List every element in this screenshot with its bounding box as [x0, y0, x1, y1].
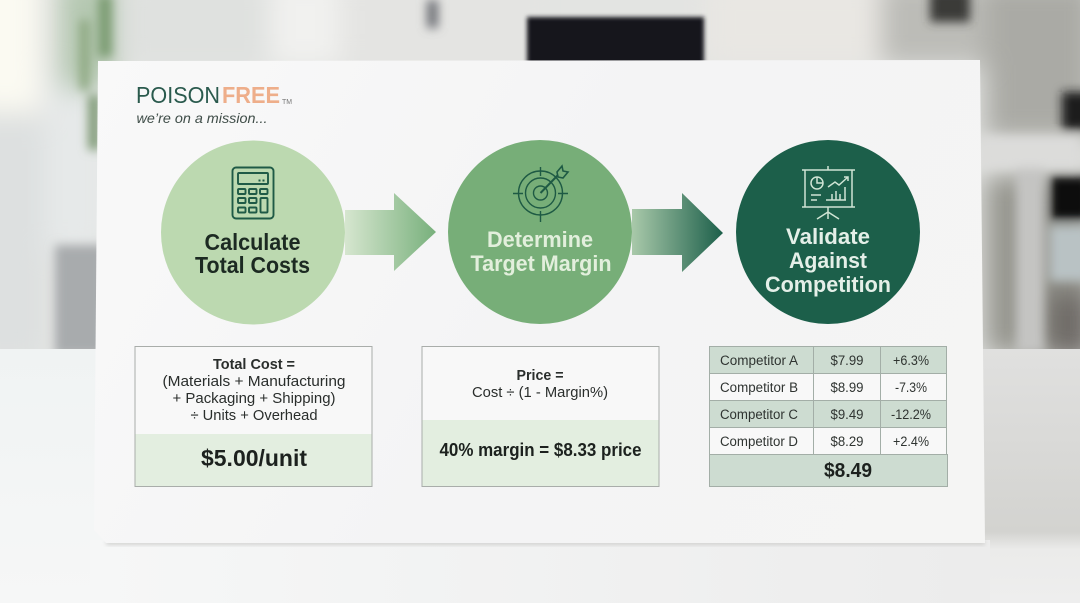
- step 3: validate against competition: [736, 140, 920, 324]
- formula text: + Packaging + Shipping): [172, 390, 336, 407]
- tagline: we’re on a mission...: [136, 110, 268, 126]
- formula text: (Materials + Manufacturing: [162, 373, 346, 390]
- heading: step 2: Target Margin: [470, 251, 612, 276]
- result: recommended price: $8.49: [824, 460, 872, 482]
- result: margin price: 40% margin = $8.33 price: [440, 439, 642, 460]
- arrow: step 2 to 3: [632, 193, 723, 272]
- heading: step 3: Competition: [765, 272, 891, 297]
- row: competitor D: $8.29: [830, 434, 864, 449]
- formula text: Total Cost =: [213, 356, 295, 373]
- heading: step 1: Calculate: [204, 229, 300, 255]
- logo: [136, 82, 292, 126]
- panel: total cost formula: [135, 346, 372, 486]
- row: competitor D: +2.4%: [893, 434, 929, 449]
- formula text: Cost ÷ (1 - Margin%): [472, 384, 608, 401]
- row: competitor B: $8.99: [830, 380, 864, 395]
- logo wordmark: POISON: [136, 82, 220, 108]
- row: competitor B: -7.3%: [895, 380, 927, 395]
- row: competitor C: Competitor C: [720, 407, 798, 422]
- panel: price formula: [422, 346, 659, 486]
- result: cost per unit: $5.00/unit: [201, 445, 307, 471]
- heading: step 2: Determine: [487, 227, 593, 252]
- logo wordmark: FREE: [222, 82, 280, 108]
- formula text: Price =: [516, 367, 564, 384]
- row: competitor A: Competitor A: [720, 353, 798, 368]
- icon: calculator: [232, 168, 274, 218]
- formula text: ÷ Units + Overhead: [190, 407, 318, 424]
- row: competitor C: $9.49: [830, 407, 864, 422]
- heading: step 3: Validate: [786, 224, 870, 249]
- trademark: TM: [282, 99, 292, 106]
- icon: target: [513, 166, 568, 222]
- row: competitor A: [720, 353, 929, 368]
- row: competitor D: Competitor D: [720, 434, 798, 449]
- step 2: determine target margin: [448, 140, 632, 324]
- row: competitor A: $7.99: [830, 353, 864, 368]
- step 1: calculate total costs: [161, 140, 345, 324]
- heading: step 3: Against: [789, 248, 868, 273]
- panel: competitor table: [710, 346, 948, 486]
- row: competitor A: +6.3%: [893, 353, 929, 368]
- icon: presentation board: [802, 166, 855, 219]
- card: [94, 60, 985, 543]
- row: competitor D: [720, 434, 929, 449]
- row: competitor B: [720, 380, 927, 395]
- heading: step 1: Total Costs: [195, 252, 310, 278]
- row: competitor C: [720, 407, 931, 422]
- row: competitor C: -12.2%: [891, 407, 931, 422]
- row: competitor B: Competitor B: [720, 380, 798, 395]
- arrow: step 1 to 2: [345, 193, 436, 271]
